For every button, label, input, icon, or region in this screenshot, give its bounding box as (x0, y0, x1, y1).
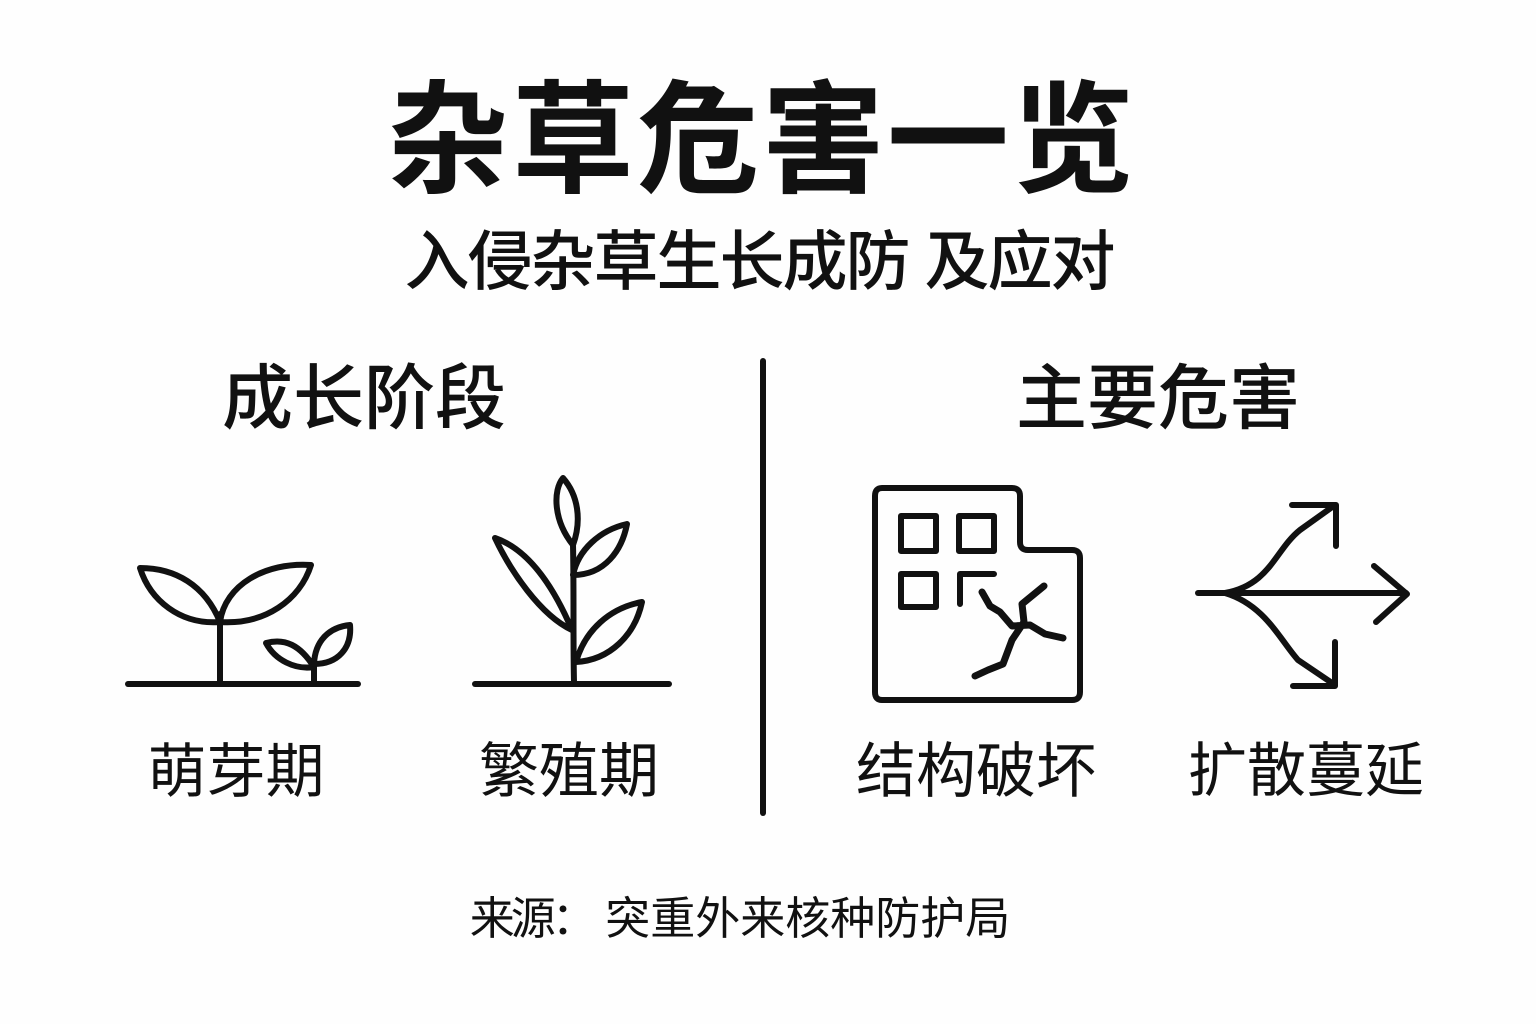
icon: sprouts (128, 565, 358, 684)
label: breeding stage: 繁殖期 (479, 738, 659, 805)
label: structural damage: 结构破坏 (856, 738, 1096, 805)
label: sprout stage: 萌芽期 (147, 739, 324, 805)
source note: 来源： 突重外来核种防护局 (470, 893, 1010, 944)
heading: growth stages: 成长阶段 (222, 360, 506, 439)
heading: main hazards: 主要危害 (1016, 360, 1300, 439)
icon: spreading arrows (1198, 505, 1407, 686)
icon: mature plant (475, 478, 669, 684)
subtitle: 入侵杂草生长成防 及应对 (404, 225, 1114, 298)
icon: cracked building (875, 488, 1080, 700)
label: spreading: 扩散蔓延 (1188, 738, 1424, 804)
center divider (760, 361, 766, 813)
title: 杂草危害一览 (387, 73, 1137, 209)
